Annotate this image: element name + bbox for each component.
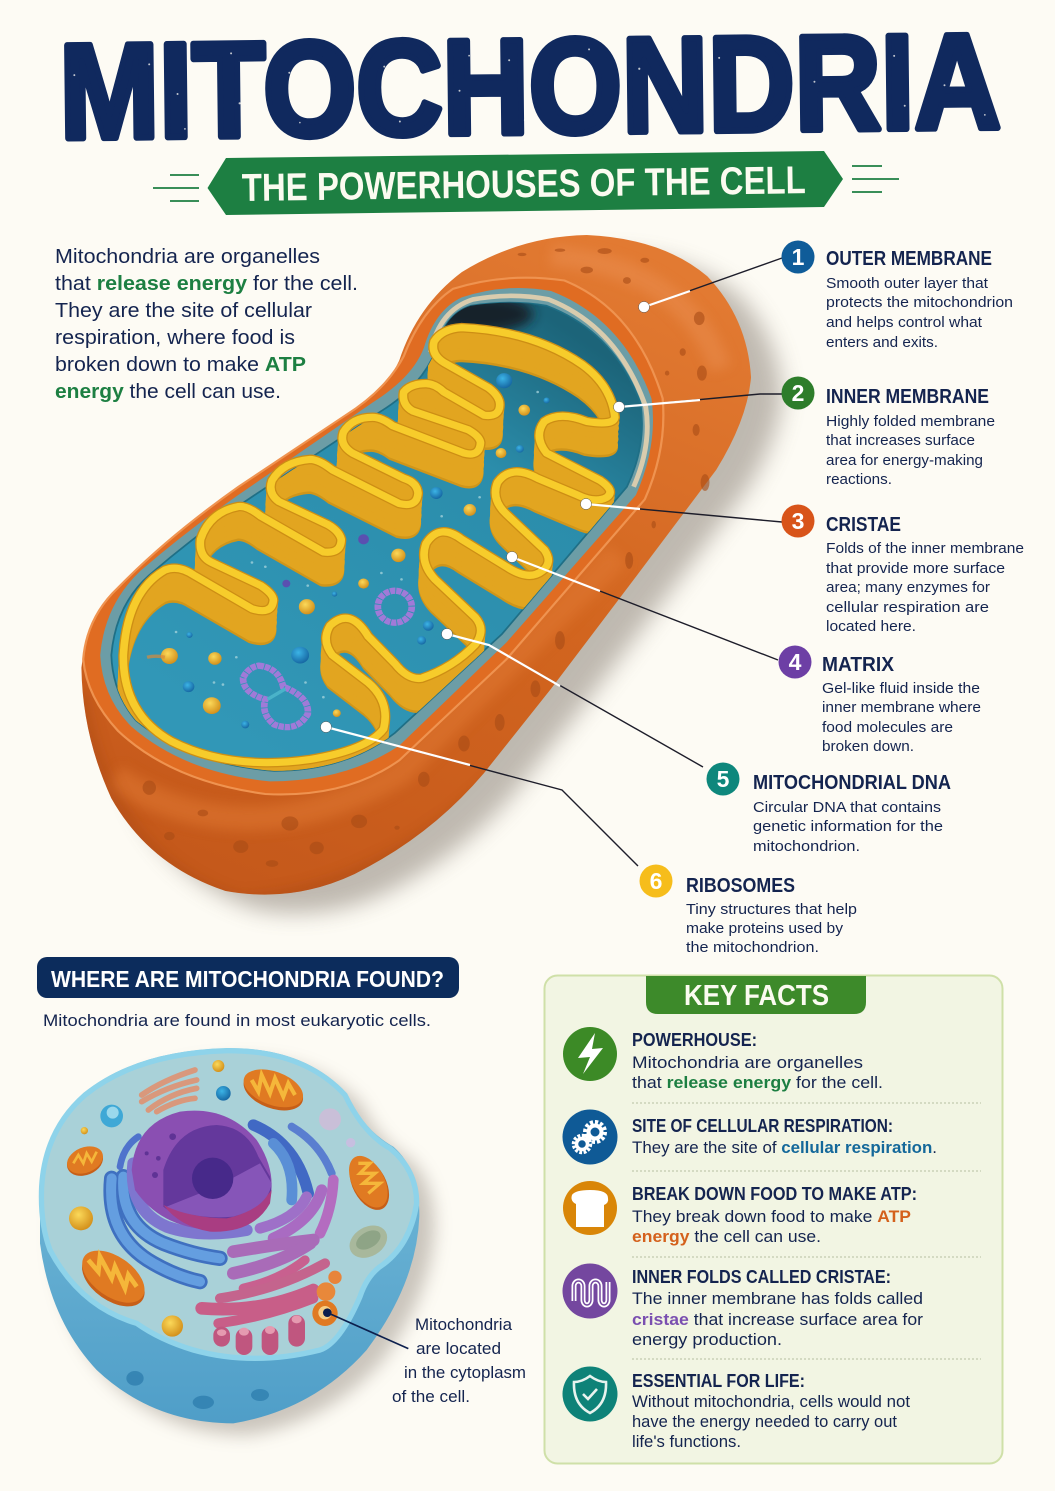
label 1: outer membrane: Smooth outer layer that — [826, 275, 989, 292]
label 1: outer membrane: OUTER MEMBRANE — [826, 248, 992, 270]
fact: cellular respiration — [562, 1110, 937, 1164]
label 6: ribosomes: RIBOSOMES — [686, 875, 795, 897]
intro text block — [55, 245, 358, 403]
panel: key facts — [544, 976, 1002, 1464]
key facts tab: KEY FACTS — [684, 980, 829, 1012]
label 1: outer membrane: and helps control what — [826, 314, 983, 331]
fact: essential for life: life's functions. — [632, 1432, 741, 1451]
endoplasmic reticulum — [111, 1125, 333, 1282]
fact: essential for life — [562, 1366, 910, 1451]
subtitle banner: THE POWERHOUSES OF THE CELL — [242, 159, 806, 210]
label 6: ribosomes: 6 — [650, 868, 662, 894]
matrix — [111, 303, 642, 771]
label 1: outer membrane — [782, 240, 1013, 351]
mitochondrion illustration — [78, 235, 782, 914]
label 5: mitochondrial DNA: genetic information for the — [753, 818, 943, 835]
cristae inner membrane — [122, 328, 615, 793]
label 2: inner membrane: 2 — [792, 380, 804, 406]
vesicles — [69, 1060, 355, 1337]
fact: cellular respiration: SITE OF CELLULAR RESPIRATION: — [632, 1115, 893, 1136]
nucleus — [132, 1111, 272, 1232]
section heading: where found — [37, 957, 459, 998]
fact: powerhouse — [563, 1027, 883, 1092]
label 6: ribosomes — [640, 864, 857, 956]
label 4: matrix: food molecules are — [822, 719, 953, 736]
fact: inner folds: cristae that increase surface area for — [632, 1310, 923, 1329]
where found description: Mitochondria are found in most eukaryotic cells. — [43, 1011, 431, 1030]
label 5: mitochondrial DNA: MITOCHONDRIAL DNA — [753, 772, 951, 794]
label 5: mitochondrial DNA — [706, 762, 951, 855]
label 2: inner membrane: reactions. — [826, 471, 892, 488]
cast shadow — [113, 254, 782, 914]
golgi apparatus — [202, 1260, 325, 1347]
label 3: cristae: located here. — [826, 618, 916, 635]
fact: inner folds: energy production. — [632, 1330, 782, 1349]
cell callout text — [392, 1316, 526, 1406]
label 1: outer membrane: 1 — [792, 244, 805, 270]
label 2: inner membrane: that increases surface — [826, 432, 975, 449]
label 3: cristae: 3 — [792, 508, 804, 534]
label 2: inner membrane: Highly folded membrane — [826, 413, 995, 430]
cell callout text: of the cell. — [392, 1388, 470, 1406]
label 3: cristae: area; many enzymes for — [826, 579, 990, 596]
label 4: matrix: Gel-like fluid inside the — [822, 680, 980, 697]
fact: break down food: They break down food to make ATP — [632, 1207, 911, 1226]
cell mitochondria — [63, 1062, 397, 1326]
label 6: ribosomes: make proteins used by — [686, 920, 844, 937]
fact: break down food: energy the cell can use. — [632, 1227, 821, 1246]
fact: break down food — [563, 1181, 917, 1246]
cream edge of opening — [431, 296, 647, 487]
intermembrane teal wall — [100, 288, 653, 781]
fact: essential for life: have the energy needed to carry out — [632, 1412, 897, 1431]
section heading: where found: WHERE ARE MITOCHONDRIA FOUND? — [51, 966, 444, 992]
fact: essential for life: ESSENTIAL FOR LIFE: — [632, 1370, 805, 1391]
cell illustration — [40, 1048, 434, 1435]
label 5: mitochondrial DNA: 5 — [717, 766, 730, 792]
cell body — [40, 1048, 419, 1423]
fact: cellular respiration: They are the site of cellular respiration. — [632, 1138, 937, 1157]
surface pits — [126, 1371, 269, 1409]
label 4: matrix: broken down. — [822, 738, 914, 755]
intro text block: Mitochondria are organelles — [55, 245, 320, 268]
cut rim — [83, 278, 663, 794]
fact: powerhouse: POWERHOUSE: — [632, 1029, 757, 1050]
label 2: inner membrane — [782, 376, 995, 488]
label 5: mitochondrial DNA: mitochondrion. — [753, 838, 860, 855]
cell callout text: Mitochondria — [415, 1316, 513, 1334]
callout leader lines — [320, 258, 782, 866]
label 3: cristae: cellular respiration are — [826, 599, 989, 616]
label 4: matrix: MATRIX — [822, 654, 895, 676]
fact: essential for life: Without mitochondria, cells would not — [632, 1392, 910, 1411]
key facts tab — [646, 976, 866, 1014]
callout pointer — [323, 1308, 408, 1349]
matrix granules — [147, 373, 550, 728]
cell callout text: in the cytoplasm — [404, 1364, 526, 1382]
intro text block: respiration, where food is — [55, 326, 295, 349]
fact: break down food: BREAK DOWN FOOD TO MAKE ATP: — [632, 1183, 917, 1204]
cell shadow — [55, 1060, 434, 1435]
fact: inner folds: INNER FOLDS CALLED CRISTAE: — [632, 1266, 891, 1287]
label 4: matrix: 4 — [789, 649, 802, 675]
mitochondrial DNA — [243, 591, 412, 727]
peach golgi — [142, 1070, 197, 1112]
fact: powerhouse: that release energy for the cell. — [632, 1073, 883, 1092]
cell callout text: are located — [416, 1340, 501, 1358]
label 3: cristae — [782, 504, 1024, 635]
label 4: matrix — [778, 646, 981, 755]
label 3: cristae: that provide more surface — [826, 560, 1005, 577]
fact: powerhouse: Mitochondria are organelles — [632, 1053, 863, 1072]
cytoplasm surface — [41, 1051, 417, 1358]
label 2: inner membrane: area for energy-making — [826, 452, 983, 469]
label 4: matrix: inner membrane where — [822, 699, 981, 716]
label 6: ribosomes: Tiny structures that help — [686, 901, 857, 918]
membrane pores — [143, 248, 710, 867]
label 6: ribosomes: the mitochondrion. — [686, 939, 819, 956]
intro text block: energy the cell can use. — [55, 380, 281, 403]
label 2: inner membrane: INNER MEMBRANE — [826, 386, 989, 408]
intro text block: They are the site of cellular — [55, 299, 312, 322]
outer membrane body — [78, 235, 751, 903]
label 1: outer membrane: enters and exits. — [826, 334, 938, 351]
label 1: outer membrane: protects the mitochondrion — [826, 294, 1013, 311]
intro text block: that release energy for the cell. — [55, 272, 358, 295]
label 5: mitochondrial DNA: Circular DNA that contains — [753, 799, 941, 816]
fact: inner folds — [562, 1264, 923, 1349]
fact: inner folds: The inner membrane has folds called — [632, 1289, 923, 1308]
intro text block: broken down to make ATP — [55, 353, 306, 376]
label 3: cristae: CRISTAE — [826, 514, 901, 536]
inner shadow at top of opening — [445, 302, 540, 333]
label 3: cristae: Folds of the inner membrane — [826, 540, 1024, 557]
